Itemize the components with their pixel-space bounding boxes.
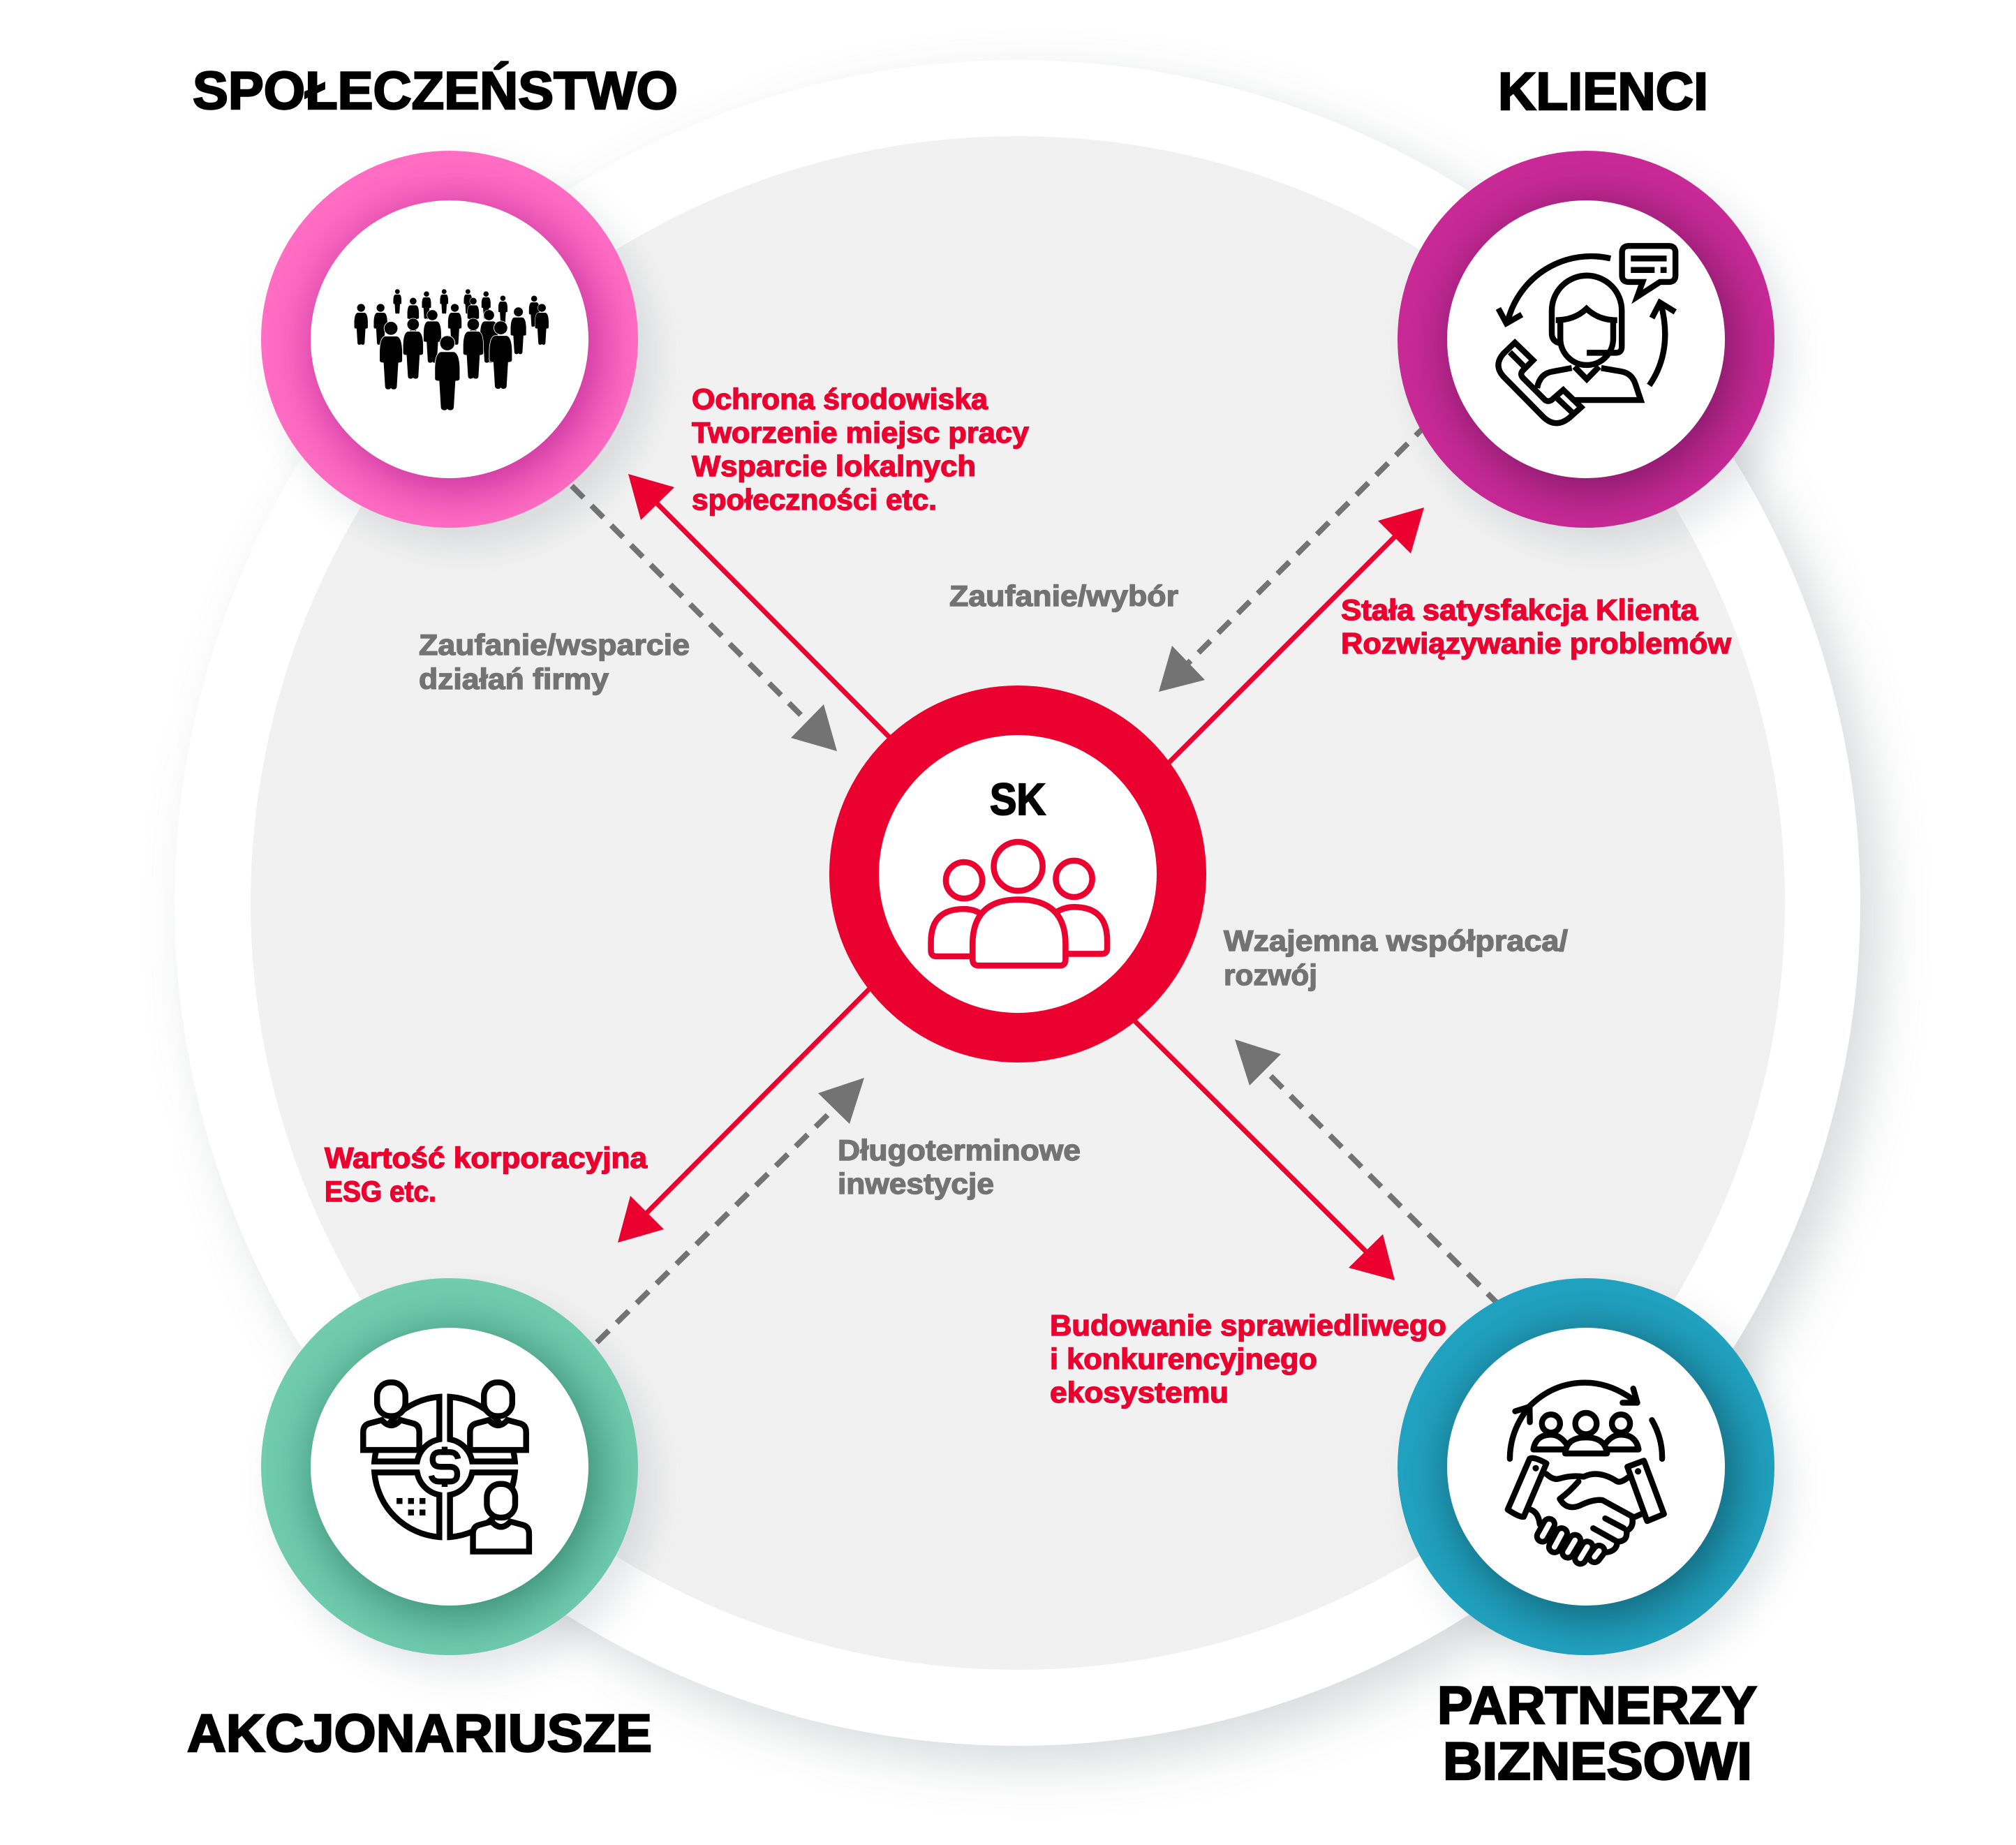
icon: crowd (355, 289, 549, 410)
heading: AKCJONARIUSZE: AKCJONARIUSZE (187, 1704, 652, 1763)
panel: Partnerzy biznesowi node (1398, 1278, 1798, 1681)
heading: PARTNERZY BIZNESOWI (1437, 1676, 1757, 1791)
heading: KLIENCI: KLIENCI (1498, 62, 1708, 121)
text: Społeczeństwo benefits (692, 383, 1030, 516)
text: Wartość korporacyjna (325, 1141, 648, 1208)
background circle: inner grey (251, 136, 1785, 1670)
heading: SPOŁECZEŃSTWO: SPOŁECZEŃSTWO (193, 61, 678, 121)
arrow: SK to Społeczeństwo (628, 474, 894, 741)
text: Klienci benefits: Stała satysfakcja Klienta (1341, 593, 1698, 626)
text: Wartość korporacyjna: ESG etc. (325, 1175, 436, 1208)
text: Zaufanie/wsparcie (419, 628, 690, 695)
text: Wartość korporacyjna: Wartość korporacyjna (325, 1141, 648, 1174)
text: Społeczeństwo benefits: społeczności etc. (692, 483, 937, 516)
green ring (261, 1278, 638, 1655)
arrow: Partnerzy to SK (1235, 1039, 1499, 1305)
text: Długoterminowe inwestycje: Długoterminowe (838, 1134, 1081, 1166)
text: Budowanie ekosystemu (1050, 1309, 1446, 1409)
blue ring (1398, 1278, 1774, 1655)
red ring (829, 686, 1206, 1062)
icon: SK group (928, 839, 1110, 969)
text: Społeczeństwo benefits: Wsparcie lokalnych (692, 450, 976, 482)
text: Zaufanie/wsparcie: Zaufanie/wsparcie (419, 628, 690, 661)
text: Długoterminowe inwestycje: inwestycje (838, 1167, 994, 1200)
arrow: SK to Akcjonariusze (618, 986, 873, 1243)
text: Zaufanie/wybór: Zaufanie/wybór (949, 579, 1178, 612)
text: Społeczeństwo benefits: Tworzenie miejsc pracy (692, 416, 1030, 449)
panel: Społeczeństwo node (261, 151, 661, 554)
arrow: Akcjonariusze to SK (597, 1078, 864, 1342)
text: Długoterminowe inwestycje (838, 1134, 1081, 1200)
arrow: Społeczeństwo to SK (572, 486, 837, 751)
text: Zaufanie/wsparcie: działań firmy (419, 662, 609, 695)
text: Klienci benefits (1341, 593, 1731, 660)
panel: Akcjonariusze node (261, 1278, 661, 1681)
text: Wzajemna współpraca: rozwój (1224, 958, 1317, 991)
heading: SK: SK (990, 774, 1046, 824)
text: Budowanie ekosystemu: ekosystemu (1050, 1376, 1229, 1409)
text: Klienci benefits: Rozwiązywanie problemów (1341, 627, 1731, 660)
arrow: SK to Klienci (1166, 507, 1424, 766)
text: Budowanie ekosystemu: Budowanie sprawiedliwego (1050, 1309, 1446, 1342)
text: Wzajemna współpraca: Wzajemna współpraca/ (1224, 924, 1568, 957)
heading: PARTNERZY BIZNESOWI: BIZNESOWI (1443, 1732, 1752, 1791)
text: Budowanie ekosystemu: i konkurencyjnego (1050, 1342, 1317, 1375)
background circle: outer white with shadow (175, 60, 1860, 1746)
arrow: SK to Partnerzy (1132, 1018, 1395, 1280)
text: Wzajemna współpraca (1224, 924, 1568, 991)
panel: SK centre node (829, 686, 1206, 1062)
text: Społeczeństwo benefits: Ochrona środowiska (692, 383, 988, 415)
icon: handshake and partners (1505, 1379, 1667, 1566)
heading: PARTNERZY BIZNESOWI: PARTNERZY (1437, 1676, 1757, 1735)
pink ring (261, 151, 638, 528)
purple ring (1398, 151, 1774, 528)
icon: call centre agent (1495, 243, 1678, 426)
panel: Klienci node (1398, 151, 1798, 554)
icon: shareholders (360, 1379, 532, 1555)
arrow: Klienci to SK (1159, 424, 1428, 692)
